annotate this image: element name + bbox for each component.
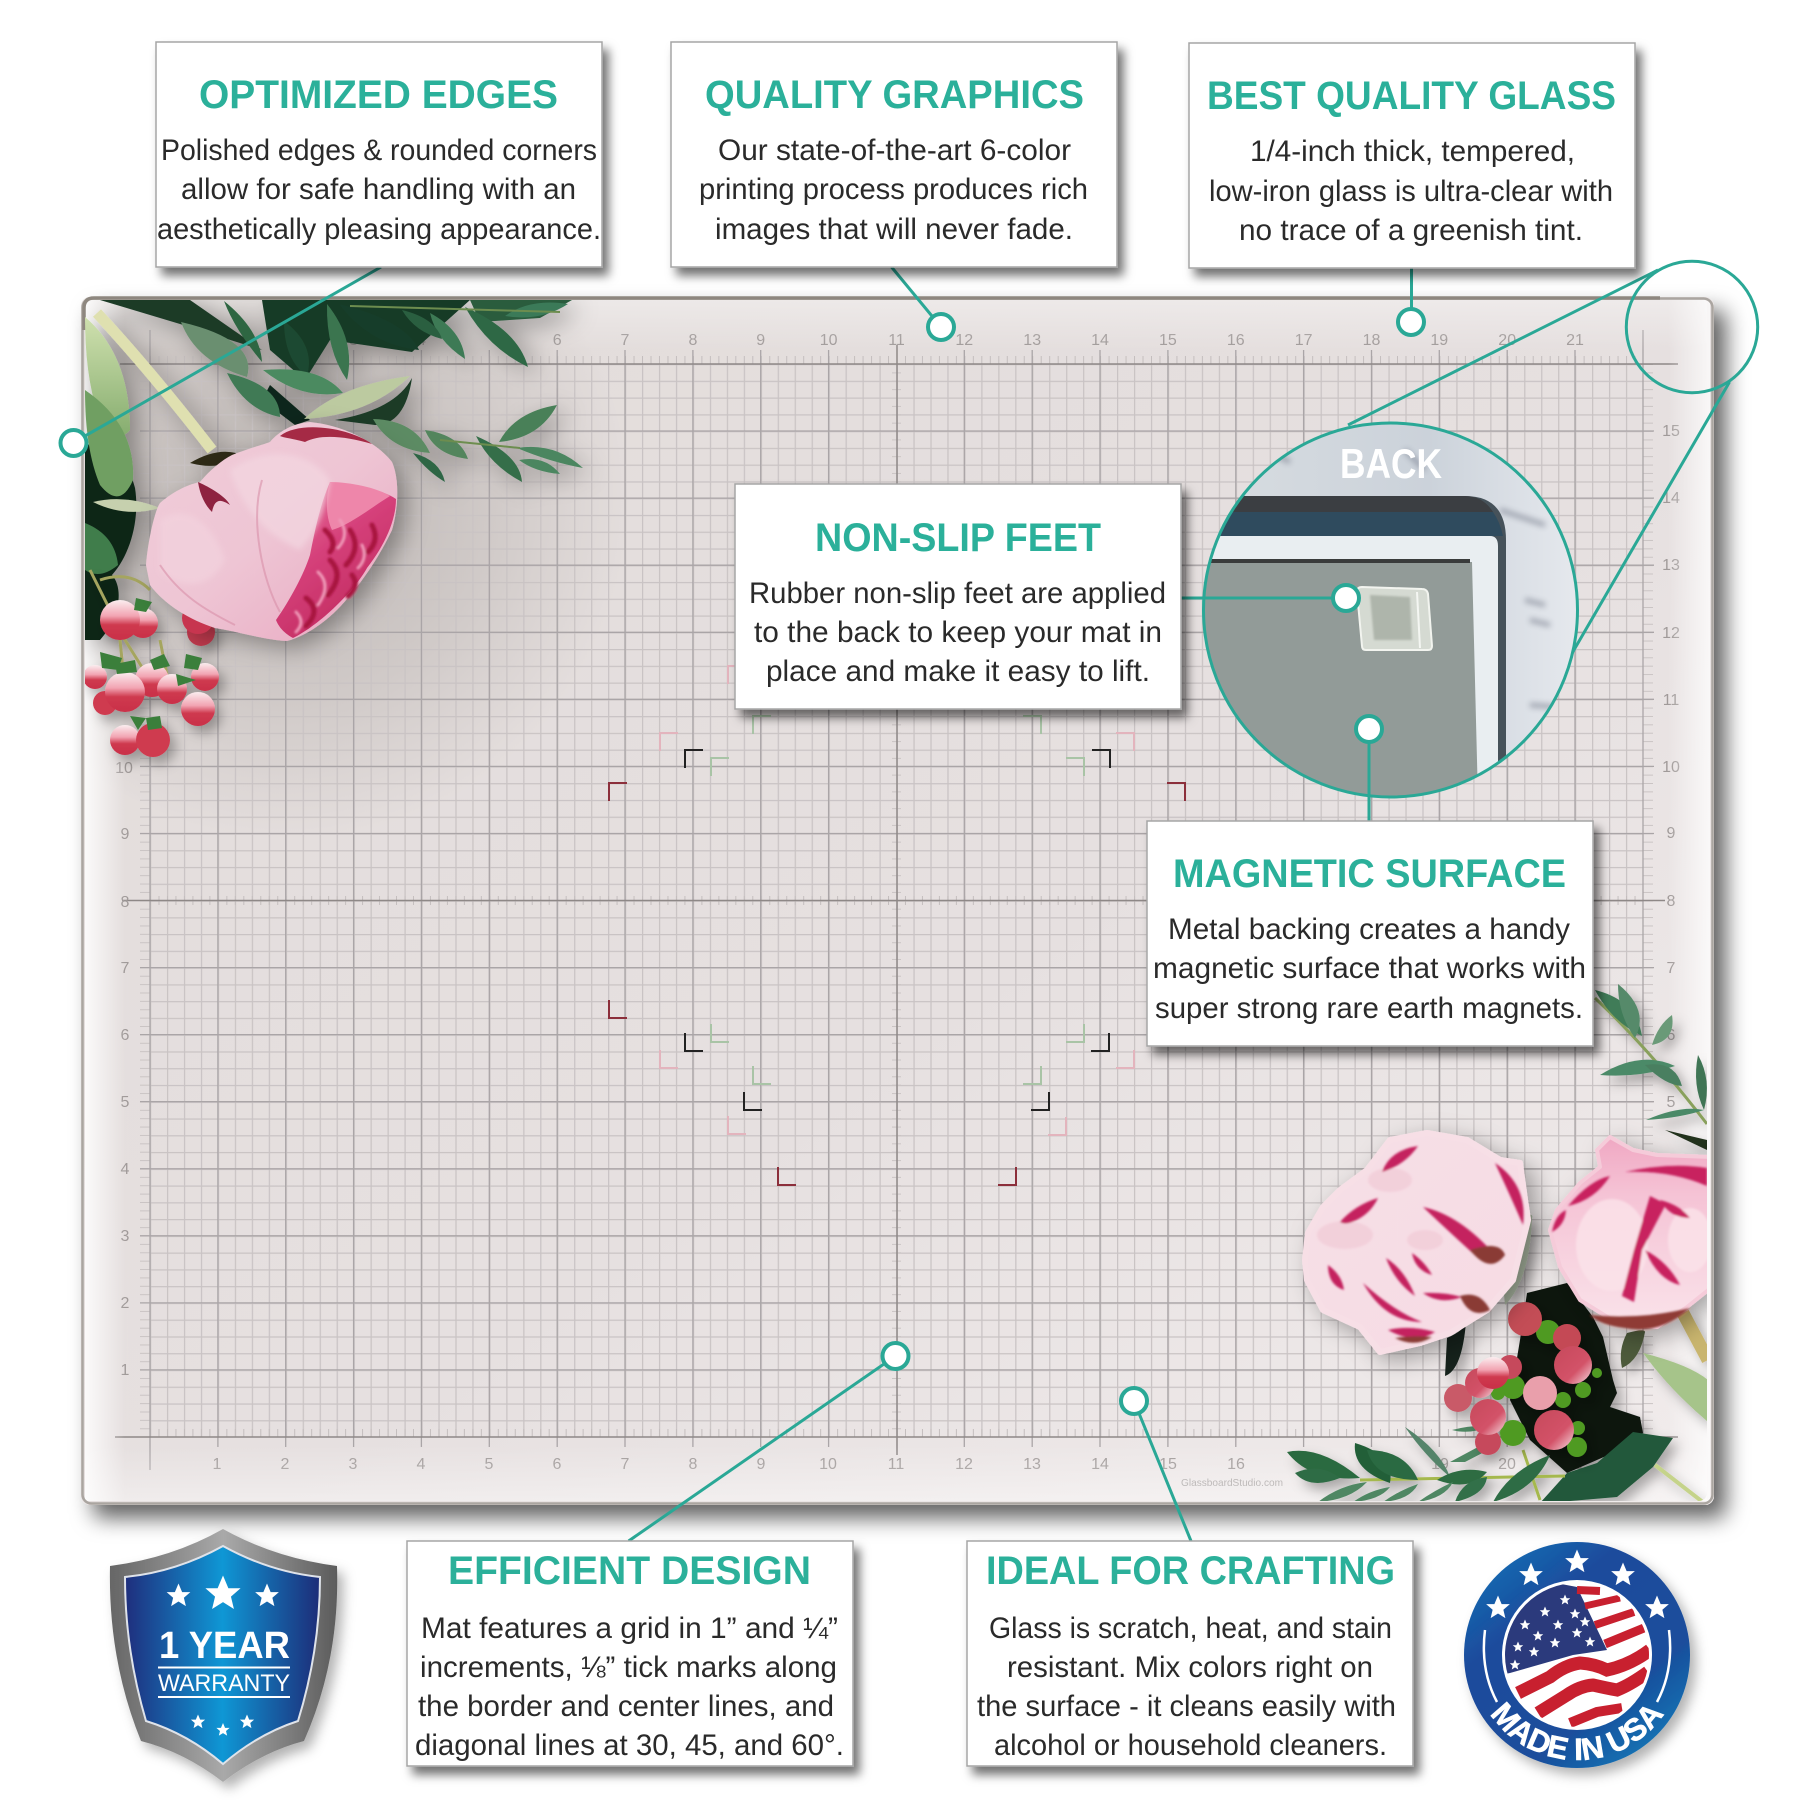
panel: non-slip feet [735,484,1181,709]
top ruler numbers: 11 [888,332,905,349]
floral decoration: bottom right [1287,984,1712,1503]
body text: Polished edges & rounded corners [161,134,597,167]
body text [1153,913,1586,1025]
foliage upper right branch [1595,984,1707,1150]
bottom ruler numbers [213,1456,1585,1473]
body text: Mat features a grid in 1” and ¼” [421,1612,838,1645]
callout: leader lines [74,267,1412,1541]
top ruler numbers: 9 [756,332,765,349]
body text: no trace of a greenish tint. [1239,214,1583,247]
body text: Our state-of-the-art 6-color [718,134,1071,167]
bottom ruler numbers: 1 [213,1456,222,1473]
bottom ruler numbers: 4 [417,1456,426,1473]
body text [749,577,1166,688]
panel: efficient design [407,1541,853,1766]
panel: ideal for crafting: IDEAL FOR CRAFTING [986,1549,1395,1593]
panel: efficient design: EFFICIENT DESIGN [448,1549,811,1593]
panel: optimized edges: OPTIMIZED EDGES [199,73,558,117]
top ruler numbers: 17 [1295,332,1313,349]
panel: quality graphics: QUALITY GRAPHICS [705,73,1084,117]
ruffled centre [296,520,375,632]
left ruler numbers: 2 [121,1295,130,1312]
body text: diagonal lines at 30, 45, and 60°. [415,1729,844,1762]
body text: 1/4-inch thick, tempered, [1250,135,1575,168]
peony bottom right B [1550,1137,1712,1329]
bottom ruler numbers: 3 [349,1456,358,1473]
top ruler numbers: 3 [349,332,358,349]
top ruler numbers: 18 [1363,332,1380,349]
left ruler numbers: 6 [121,1027,130,1044]
back-of-mat magnified view [1200,420,1580,800]
left ruler numbers: 9 [121,826,130,843]
body text: Rubber non-slip feet are applied [749,577,1166,610]
top ruler numbers: 14 [1091,332,1109,349]
bottom ruler numbers: 5 [485,1456,494,1473]
peony top left [146,422,397,641]
right ruler numbers [1662,423,1680,1111]
panel: best quality glass: BEST QUALITY GLASS [1207,74,1616,118]
right ruler numbers: 6 [1667,1027,1676,1044]
body text: aesthetically pleasing appearance. [157,213,601,246]
grey backing [1200,562,1478,800]
right ruler numbers: 15 [1662,423,1680,440]
left ruler numbers: 8 [121,894,130,911]
badge: 1 year warranty shield [110,1529,337,1782]
glass edge highlights [82,298,1712,1504]
body text: images that will never fade. [715,213,1073,246]
badge: 1 year warranty shield: WARRANTY [158,1670,290,1697]
bottom ruler numbers: 6 [553,1456,562,1473]
left ruler numbers: 1 [121,1362,130,1379]
body text: magnetic surface that works with [1153,952,1586,985]
right ruler numbers: 9 [1667,825,1676,842]
badge: 1 year warranty shield: 1 YEAR [159,1625,290,1667]
right ruler numbers: 14 [1662,490,1680,507]
body text: the surface - it cleans easily with [977,1690,1396,1723]
left ruler numbers: 3 [121,1228,130,1245]
bottom ruler numbers: 12 [955,1456,973,1473]
foliage top left [85,300,583,640]
left ruler numbers: 7 [121,960,130,977]
bottom ruler numbers: 20 [1498,1456,1516,1473]
right ruler numbers: 7 [1667,960,1676,977]
peony bottom right A [1305,1133,1528,1352]
right ruler numbers: 13 [1662,557,1680,574]
top ruler numbers: 19 [1430,332,1448,349]
rubber foot [1357,587,1432,650]
flag [1500,1580,1650,1723]
badge stars [1486,1550,1669,1618]
BACK label: BACK [1340,440,1442,487]
top ruler numbers [349,332,1584,349]
top ruler numbers: 6 [553,332,562,349]
top ruler numbers: 15 [1159,332,1177,349]
badge: made in USA [1463,1542,1703,1782]
right ruler numbers: 12 [1662,625,1680,642]
left ruler numbers: 10 [115,760,133,777]
panel: ideal for crafting [967,1541,1413,1766]
body text: the border and center lines, and [418,1690,834,1723]
bottom ruler numbers: 14 [1091,1456,1109,1473]
axes and centre lines [115,345,1678,1455]
panel: magnetic surface: MAGNETIC SURFACE [1173,852,1566,896]
zoom ring at corner [1626,261,1758,393]
inner bloom [276,482,396,638]
left ruler numbers: 4 [121,1161,130,1178]
bottom ruler numbers: 16 [1227,1456,1245,1473]
zoom connector lines [1348,270,1730,654]
body text [415,1612,844,1762]
body text: increments, ⅛” tick marks along [420,1651,837,1684]
top ruler numbers: 13 [1023,332,1041,349]
top ruler numbers: 4 [417,332,426,349]
right ruler numbers: 5 [1667,1094,1676,1111]
watermark: GlassboardStudio.com [1181,1477,1283,1489]
top ruler numbers: 10 [820,332,838,349]
body text [157,134,601,246]
body text [699,134,1088,246]
bottom ruler numbers: 8 [689,1456,698,1473]
top ruler numbers: 16 [1227,332,1245,349]
foliage lower right [1287,1214,1708,1503]
top ruler numbers: 8 [688,332,697,349]
body text: allow for safe handling with an [181,173,576,206]
bottom ruler numbers: 9 [757,1456,766,1473]
bottom ruler numbers: 19 [1431,1456,1449,1473]
top ruler numbers: 7 [621,332,630,349]
top ruler numbers: 12 [955,332,973,349]
dark glass frame [1466,496,1506,761]
panel: quality graphics [671,42,1117,267]
badge caption: MADE IN USA [1490,1701,1664,1760]
top ruler numbers: 21 [1566,332,1584,349]
body text: place and make it easy to lift. [766,655,1150,688]
right ruler numbers: 11 [1663,692,1679,709]
bottom ruler numbers: 10 [819,1456,837,1473]
glass mat board [76,293,1743,1535]
floral decoration: top left [83,300,583,757]
bottom ruler numbers: 15 [1159,1456,1177,1473]
bottom ruler numbers: 7 [621,1456,630,1473]
bottom ruler numbers: 2 [281,1456,290,1473]
body text [1209,135,1613,247]
berries top left [83,570,219,757]
left ruler numbers: 5 [121,1094,130,1111]
body text: low-iron glass is ultra-clear with [1209,175,1613,208]
panel: magnetic surface [1147,821,1593,1046]
panel: non-slip feet: NON-SLIP FEET [815,516,1101,560]
crop marks [609,666,1185,1185]
top ruler numbers: 20 [1498,332,1516,349]
right ruler numbers: 10 [1662,759,1680,776]
bottom ruler numbers: 21 [1567,1456,1585,1473]
marble background [1244,424,1576,755]
white band [1212,536,1498,774]
body text: resistant. Mix colors right on [1007,1651,1373,1684]
ruler ticks [140,356,1653,1437]
callout: anchor dots [60,309,1424,1414]
body text: super strong rare earth magnets. [1155,992,1583,1025]
minor grid [150,364,1643,1437]
berries bottom right [1444,1302,1602,1457]
panel: optimized edges [156,42,602,267]
panel: best quality glass [1189,43,1635,268]
body text: Metal backing creates a handy [1168,913,1570,946]
body text [977,1612,1396,1762]
body text: alcohol or household cleaners. [994,1729,1387,1762]
left ruler numbers [115,760,133,1379]
body text: to the back to keep your mat in [754,616,1162,649]
right ruler numbers: 8 [1667,893,1676,910]
body text: printing process produces rich [699,173,1088,206]
major grid lines [140,330,1654,1470]
board soft vignette [104,300,574,786]
body text: Glass is scratch, heat, and stain [989,1612,1392,1645]
bottom ruler numbers: 11 [888,1456,904,1473]
bottom ruler numbers: 13 [1023,1456,1041,1473]
